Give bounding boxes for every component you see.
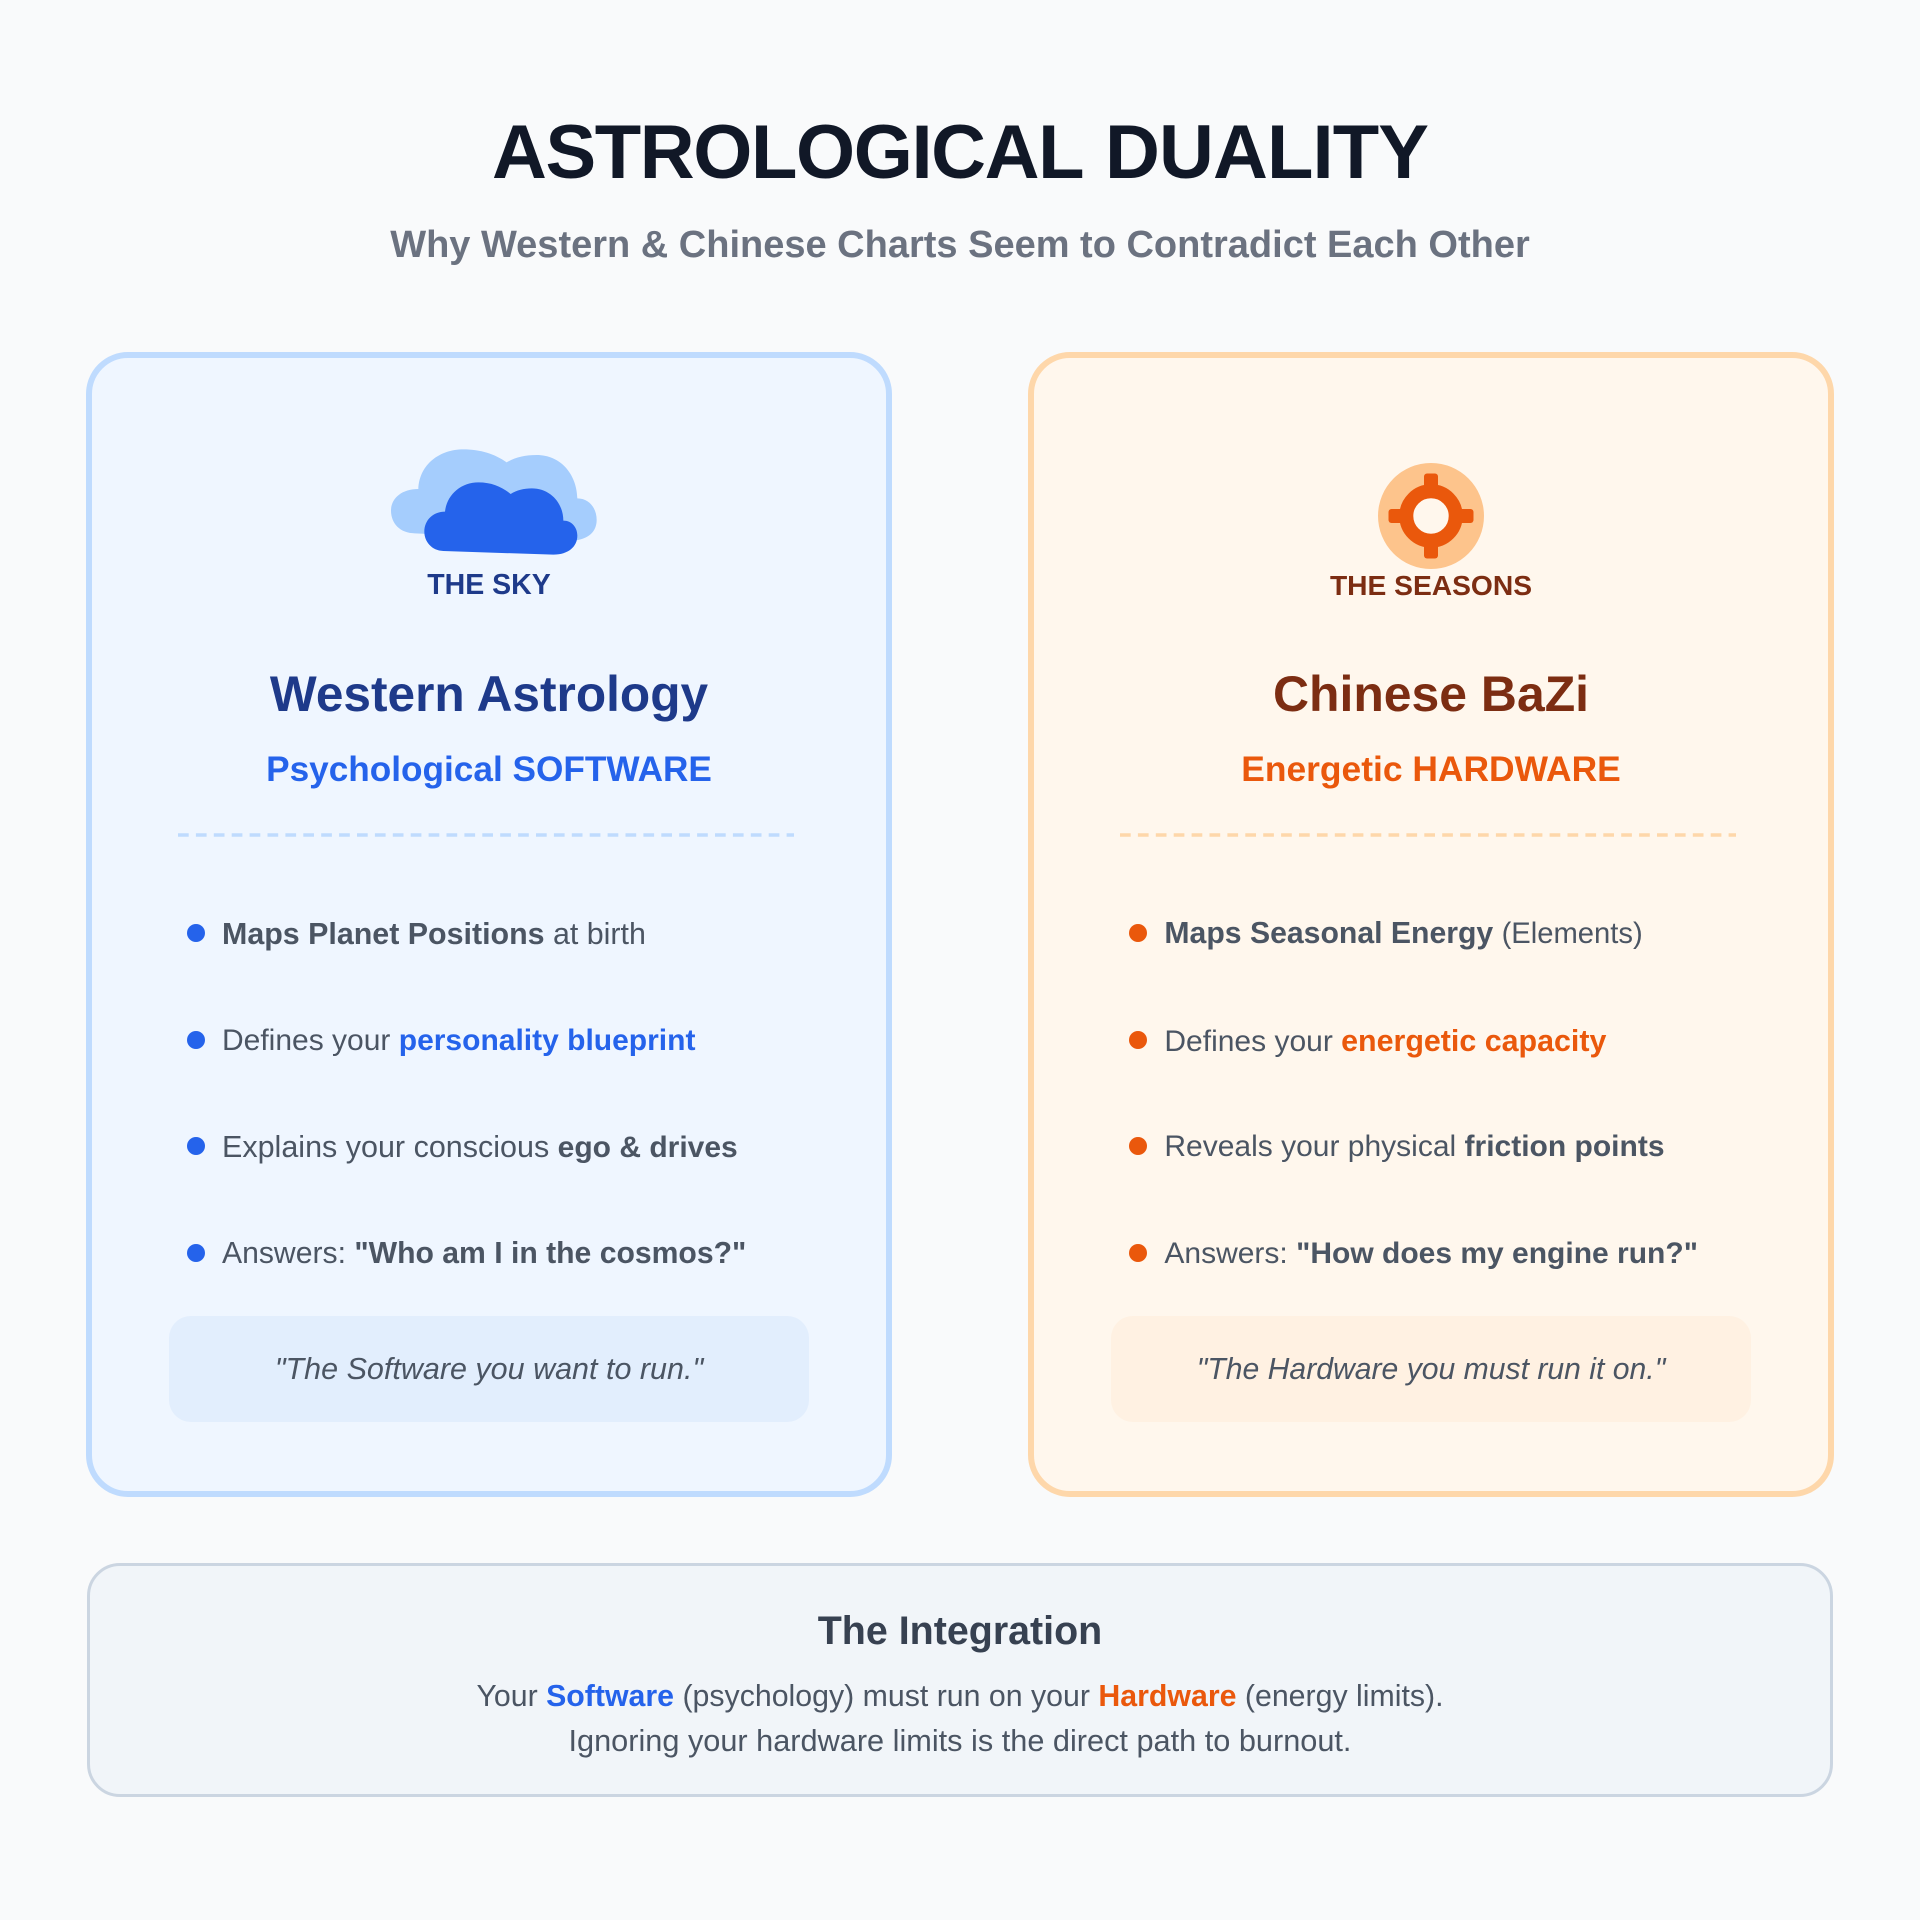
heading: chinese bazi: Chinese BaZi — [1273, 666, 1589, 722]
quote text: "The Hardware you must run it on." — [1197, 1353, 1665, 1386]
integration text: Your Software (psychology) must run on your Hardware (energy limits). — [476, 1680, 1444, 1713]
panel: chinese bazi — [1028, 352, 1834, 1497]
heading: western astrology: Western Astrology — [270, 666, 708, 722]
icon: seasons — [1378, 463, 1484, 569]
text 1: Maps Planet Positions at birth — [222, 917, 646, 951]
integration text — [476, 1680, 1444, 1758]
bullet 2 — [1129, 1031, 1147, 1049]
subtitle: Why Western & Chinese Charts Seem to Contradict Each Other — [390, 224, 1530, 266]
text 4: Answers: "Who am I in the cosmos?" — [222, 1237, 746, 1270]
title: ASTROLOGICAL DUALITY — [492, 110, 1428, 195]
text 3: Reveals your physical friction points — [1164, 1130, 1665, 1163]
integration text: Ignoring your hardware limits is the direct path to burnout. — [569, 1722, 1351, 1758]
bullet 3 — [186, 1137, 204, 1155]
subheading: energetic hardware: Energetic HARDWARE — [1241, 749, 1621, 789]
bullet 1 — [186, 924, 204, 942]
list: western bullets — [187, 917, 746, 1270]
text 1: Maps Seasonal Energy (Elements) — [1164, 917, 1643, 950]
bullet 4 — [1129, 1244, 1147, 1262]
bullet 3 — [1129, 1137, 1147, 1155]
panel: integration — [87, 1562, 1833, 1797]
callout: software quote — [169, 1316, 809, 1422]
text 2: Defines your personality blueprint — [222, 1024, 695, 1057]
integration heading: The Integration — [818, 1609, 1102, 1653]
text 2: Defines your energetic capacity — [1164, 1024, 1606, 1058]
list: chinese bullets — [1129, 917, 1698, 1270]
bullet 4 — [186, 1244, 204, 1262]
bullet 2 — [186, 1031, 204, 1049]
subheading: psychological software: Psychological SOFTWARE — [266, 750, 712, 789]
text 4: Answers: "How does my engine run?" — [1164, 1237, 1698, 1270]
bullet 1 — [1129, 924, 1147, 942]
label: the sky: THE SKY — [427, 569, 551, 601]
icon: cloud — [391, 449, 597, 555]
quote text: "The Software you want to run." — [275, 1352, 703, 1386]
text 3: Explains your conscious ego & drives — [222, 1130, 738, 1164]
panel: western astrology — [86, 352, 892, 1497]
callout: hardware quote — [1111, 1316, 1751, 1422]
label: the seasons: THE SEASONS — [1330, 569, 1532, 601]
